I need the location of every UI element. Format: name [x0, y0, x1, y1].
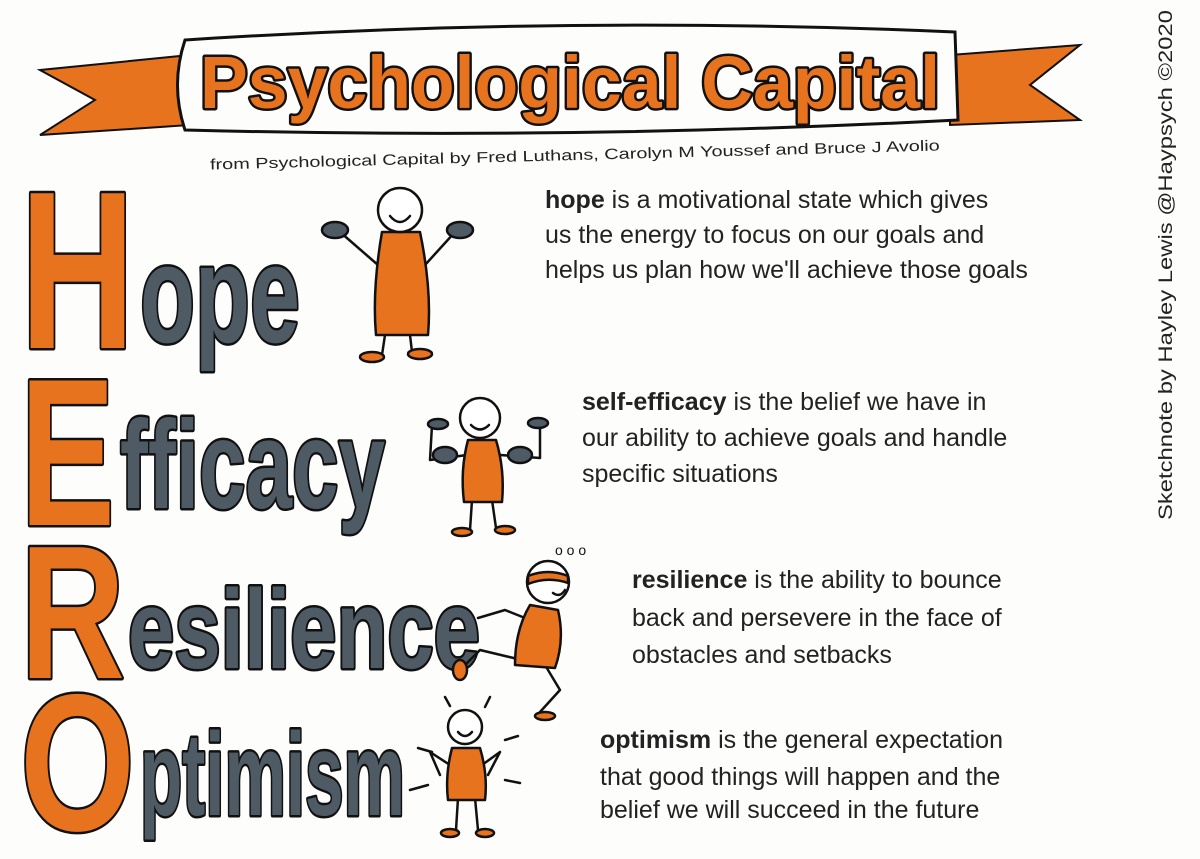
- figure: resilience runner: [453, 542, 586, 720]
- word: Optimism: [20, 654, 405, 859]
- text: resilience: resilience is the ability to bounce: [632, 566, 1002, 594]
- text: resilience: obstacles and setbacks: [632, 641, 892, 669]
- figure: hope: [322, 188, 473, 362]
- text: optimism: [600, 726, 1003, 824]
- title: Psychological Capital: [200, 41, 940, 124]
- subtitle: from Psychological Capital by Fred Luthans, Carolyn M Youssef and Bruce J Avolio: [210, 137, 940, 174]
- ribbon tail left: [40, 55, 190, 135]
- scroll: [178, 25, 958, 133]
- figure: optimism: [410, 697, 520, 837]
- text: self-efficacy: our ability to achieve goals and handle: [582, 424, 1007, 452]
- word: Efficacy: fficacy: [120, 396, 385, 535]
- text: optimism: optimism is the general expectation: [600, 726, 1003, 754]
- word: Hope: ope: [140, 215, 300, 372]
- text: resilience: back and persevere in the face of: [632, 604, 1002, 632]
- text: hope: us the energy to focus on our goals and: [545, 221, 984, 249]
- text: hope: helps us plan how we'll achieve those goals: [545, 256, 1028, 284]
- figure: resilience runner: o o o: [555, 542, 586, 558]
- text: self-efficacy: [582, 388, 1007, 488]
- text: self-efficacy: specific situations: [582, 460, 778, 488]
- word: Resilience: R: [20, 507, 125, 719]
- figure: self-efficacy: [428, 398, 548, 536]
- text: optimism: that good things will happen and the: [600, 763, 1000, 791]
- banner: title ribbon: [40, 25, 1080, 135]
- word: Hope: [20, 144, 300, 396]
- text: hope: [545, 186, 1028, 284]
- word: Optimism: ptimism: [140, 709, 405, 841]
- text: resilience: [632, 566, 1002, 669]
- word: Resilience: esilience: [128, 567, 480, 692]
- word: Hope: H: [20, 144, 135, 396]
- text: optimism: belief we will succeed in the future: [600, 796, 979, 824]
- word: Efficacy: E: [20, 335, 115, 570]
- credit: vertical: Sketchnote by Hayley Lewis @Haypsych ©2020: [1156, 10, 1177, 520]
- text: hope: hope is a motivational state which gives: [545, 186, 988, 214]
- ribbon tail right: [950, 45, 1080, 125]
- text: self-efficacy: self-efficacy is the belief we have in: [582, 388, 986, 416]
- word: Efficacy: [20, 335, 385, 570]
- word: Resilience: [20, 507, 480, 719]
